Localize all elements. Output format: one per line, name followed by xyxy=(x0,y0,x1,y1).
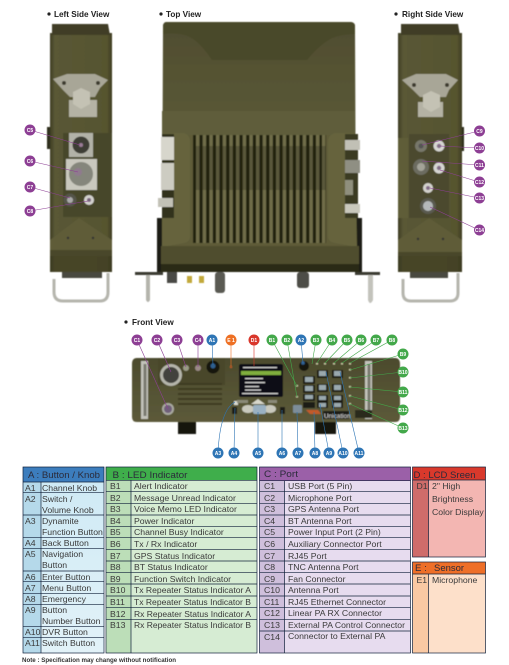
panel: C port table: Fan Connector xyxy=(288,574,346,584)
panel: A button and knob table: A : Button / Knob xyxy=(28,470,100,481)
panel: C port table: C4 xyxy=(264,516,275,526)
panel: B LED indicator table: Message Unread Indicator xyxy=(134,493,236,503)
panel: B LED indicator table: Voice Memo LED Indicator xyxy=(134,504,237,514)
panel: A button and knob table: Emergency xyxy=(42,594,87,604)
panel: A button and knob table: Back Button xyxy=(42,538,89,548)
panel: D LCD screen table xyxy=(412,467,486,557)
panel: C port table: Auxiliary Connector Port xyxy=(288,539,382,549)
panel: A button and knob table: A7 xyxy=(25,583,36,593)
panel: A button and knob table: A2 xyxy=(25,494,36,504)
panel: B LED indicator table: B5 xyxy=(110,527,121,537)
panel: A button and knob table: Volume Knob xyxy=(42,505,94,515)
panel: D LCD screen table: Brightness xyxy=(432,494,474,504)
panel: B LED indicator table: B : LED Indicator xyxy=(112,470,188,481)
callouts: front view markers: C4 xyxy=(195,338,201,344)
panel: A button and knob table: Function Button xyxy=(42,527,103,537)
callouts: front view markers: B5 xyxy=(344,338,350,344)
panel: B LED indicator table: B7 xyxy=(110,551,121,561)
callouts: front view markers: A10 xyxy=(338,451,348,457)
callouts: front view markers: E 1 xyxy=(227,338,235,344)
panel: D LCD screen table: Color Display xyxy=(432,507,484,517)
heading: left side view: Left Side View xyxy=(54,10,110,19)
panel: E sensor table xyxy=(412,562,486,653)
panel: B LED indicator table: B1 xyxy=(110,481,121,491)
panel: B LED indicator table xyxy=(106,467,257,653)
callouts: front view markers: B6 xyxy=(358,338,364,344)
panel: A button and knob table: A5 xyxy=(25,549,36,559)
panel: C port table: C6 xyxy=(264,539,275,549)
panel: C port table: C9 xyxy=(264,574,275,584)
panel: B LED indicator table: Alert Indicator xyxy=(134,481,188,491)
panel: A button and knob table: Enter Button xyxy=(42,572,90,582)
panel: A button and knob table: Channel Knob xyxy=(42,483,97,493)
callouts: front view markers: B8 xyxy=(389,338,395,344)
callouts: front view markers: B12 xyxy=(398,408,408,414)
heading: top view: Top View xyxy=(166,10,202,19)
callouts: left side ports: C8 xyxy=(27,209,33,215)
callouts: front view markers: B11 xyxy=(399,390,408,396)
panel: B LED indicator table: B9 xyxy=(110,574,121,584)
device: front view xyxy=(132,358,400,434)
device: top view xyxy=(135,22,380,303)
panel: D LCD screen table: D1 xyxy=(416,481,428,491)
callouts: front view markers: A6 xyxy=(279,451,285,457)
callouts: front view markers: A1 xyxy=(209,338,215,344)
panel: C port table: Microphone Port xyxy=(288,493,352,503)
callouts: right side ports: C13 xyxy=(475,196,484,202)
panel: A button and knob table: A1 xyxy=(25,483,36,493)
panel: C port table: C10 xyxy=(264,585,280,595)
callouts: front view markers: B3 xyxy=(313,338,319,344)
panel: A button and knob table: A10 xyxy=(25,627,41,637)
panel: A button and knob table: DVR Button xyxy=(42,627,88,637)
callouts: front view markers: C1 xyxy=(134,338,140,344)
panel: C port table: Linear PA RX Connector xyxy=(288,608,382,618)
panel: E sensor table: E : xyxy=(415,563,427,574)
panel: B LED indicator table: Rx Repeater Status Indicator A xyxy=(134,609,251,619)
callouts: front view markers: B4 xyxy=(329,338,335,344)
panel: C port table: BT Antenna Port xyxy=(288,516,352,526)
panel: B LED indicator table: GPS Status Indicator xyxy=(134,551,215,561)
panel: C port table: C8 xyxy=(264,562,275,572)
panel: B LED indicator table: Rx Repeater Status Indicator B xyxy=(134,620,251,630)
panel: A button and knob table: A8 xyxy=(25,594,36,604)
panel: B LED indicator table: B2 xyxy=(110,493,121,503)
panel: B LED indicator table: Tx / Rx Indicator xyxy=(134,539,197,549)
callouts: front view markers: A7 xyxy=(295,451,301,457)
panel: A button and knob table: A4 xyxy=(25,538,36,548)
panel: B LED indicator table: B8 xyxy=(110,562,121,572)
panel: A button and knob table: Button xyxy=(42,560,67,570)
panel: B LED indicator table: B4 xyxy=(110,516,121,526)
callouts: left side ports xyxy=(24,124,88,216)
panel: C port table: C13 xyxy=(264,620,280,630)
panel: C port table: External PA Control Connector xyxy=(288,620,405,630)
callouts: right side ports: C10 xyxy=(475,146,484,152)
panel: B LED indicator table: BT Status Indicator xyxy=(134,562,208,572)
callouts: front view markers: B13 xyxy=(398,426,408,432)
panel: A button and knob table: A3 xyxy=(25,516,36,526)
panel: C port table: Antenna Port xyxy=(288,585,339,595)
panel: A button and knob table: Switch / xyxy=(42,494,73,504)
panel: C port table xyxy=(260,467,410,653)
panel: B LED indicator table: Channel Busy Indicator xyxy=(134,527,224,537)
callouts: right side ports: C14 xyxy=(475,228,484,234)
panel: A button and knob table xyxy=(23,467,104,653)
callouts: front view markers: C3 xyxy=(174,338,180,344)
callouts: front view markers: A9 xyxy=(326,451,332,457)
panel: C port table: C14 xyxy=(264,632,280,642)
panel: C port table: GPS Antenna Port xyxy=(288,504,360,514)
callouts: left side ports: C6 xyxy=(27,159,33,165)
callouts: front view markers: A2 xyxy=(298,338,304,344)
callouts: front view markers: A5 xyxy=(255,451,261,457)
panel: B LED indicator table: B3 xyxy=(110,504,121,514)
callouts: front view markers: B9 xyxy=(400,352,406,358)
panel: C port table: RJ45 Port xyxy=(288,551,327,561)
panel: C port table: C : Port xyxy=(264,469,298,480)
callouts: left side ports: C5 xyxy=(27,128,33,134)
panel: C port table: C5 xyxy=(264,527,275,537)
callouts: right side ports: C11 xyxy=(475,163,484,169)
panel: B LED indicator table: Tx Repeater Status Indicator A xyxy=(134,585,251,595)
panel: B LED indicator table: B10 xyxy=(110,585,126,595)
panel: B LED indicator table: Function Switch Indicator xyxy=(134,574,231,584)
panel: A button and knob table: Navigation xyxy=(42,549,83,559)
panel: B LED indicator table: B11 xyxy=(110,597,125,607)
panel: C port table: Power Input Port (2 Pin) xyxy=(288,527,381,537)
panel: C port table: Connector to External PA xyxy=(288,631,386,641)
panel: A button and knob table: A9 xyxy=(25,605,36,615)
footnote: Note : Specification may change without notification xyxy=(22,657,176,664)
panel: C port table: TNC Antenna Port xyxy=(288,562,359,572)
panel: A button and knob table: Button xyxy=(42,605,67,615)
panel: C port table: C12 xyxy=(264,608,280,618)
callouts: front view markers: B7 xyxy=(373,338,379,344)
callouts: right side ports: C9 xyxy=(476,129,483,135)
panel: A button and knob table: Menu Button xyxy=(42,583,91,593)
panel: C port table: C3 xyxy=(264,504,275,514)
panel: A button and knob table: Dynamite xyxy=(42,516,79,526)
panel: B LED indicator table: Power Indicator xyxy=(134,516,194,526)
callouts: front view markers: A4 xyxy=(231,451,237,457)
device: left side view xyxy=(47,24,112,301)
panel: C port table: C2 xyxy=(264,493,275,503)
callouts: front view markers: B10 xyxy=(398,370,408,376)
device: right side view xyxy=(398,24,464,301)
panel: D LCD screen table: D : LCD Sreen xyxy=(414,470,476,481)
callouts: front view markers: B2 xyxy=(284,338,290,344)
callouts: front view markers: A11 xyxy=(355,451,364,457)
callouts: front view markers: C2 xyxy=(154,338,160,344)
panel: C port table: C11 xyxy=(264,597,279,607)
callouts: front view markers: A8 xyxy=(312,451,318,457)
panel: E sensor table: E1 xyxy=(416,575,427,585)
panel: B LED indicator table: B12 xyxy=(110,609,126,619)
panel: D LCD screen table: 2" High xyxy=(432,481,460,491)
panel: B LED indicator table: B6 xyxy=(110,539,121,549)
panel: C port table: USB Port (5 Pin) xyxy=(288,481,352,491)
panel: C port table: C7 xyxy=(264,551,275,561)
panel: A button and knob table: Switch Button xyxy=(42,638,95,648)
panel: C port table: RJ45 Ethernet Connector xyxy=(288,597,386,607)
callouts: left side ports: C7 xyxy=(27,185,33,191)
panel: C port table: C1 xyxy=(264,481,275,491)
callouts: right side ports xyxy=(422,126,485,236)
panel: A button and knob table: Number Button xyxy=(42,616,101,626)
device: front view: Unication xyxy=(324,413,351,420)
callouts: front view markers: D1 xyxy=(251,338,257,344)
heading: front view: Front View xyxy=(132,318,174,327)
callouts: right side ports: C12 xyxy=(475,180,484,186)
heading: right side view: Right Side View xyxy=(402,10,464,19)
panel: B LED indicator table: B13 xyxy=(110,620,126,630)
callouts: front view markers xyxy=(132,334,408,458)
panel: B LED indicator table: Tx Repeater Status Indicator B xyxy=(134,597,251,607)
callouts: front view markers: A3 xyxy=(215,451,221,457)
panel: E sensor table: Sensor xyxy=(434,563,465,574)
panel: A button and knob table: A6 xyxy=(25,572,36,582)
panel: E sensor table: Microphone xyxy=(432,575,478,585)
panel: A button and knob table: A11 xyxy=(25,638,40,648)
callouts: front view markers: B1 xyxy=(269,338,275,344)
